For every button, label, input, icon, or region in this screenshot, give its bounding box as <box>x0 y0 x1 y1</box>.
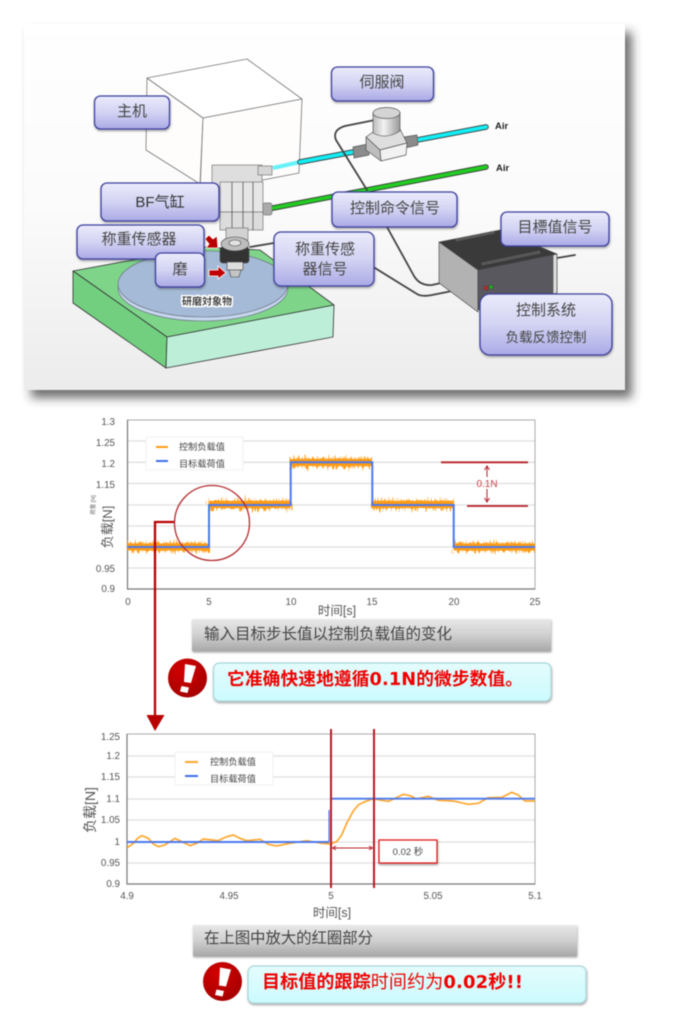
chart: zoomed step response: 4.9 <box>120 891 134 902</box>
green stage <box>73 247 334 368</box>
signal wires <box>250 120 575 296</box>
callout: control system: 控制系统 <box>516 302 576 319</box>
chart: step response: 1.15 <box>96 480 116 491</box>
chart: zoomed step response: 1.1 <box>106 794 120 805</box>
callout: target value signal <box>501 212 609 246</box>
chart: zoomed step response: 5.1 <box>528 891 542 902</box>
marker lines at 5.00 and 5.02 <box>331 729 374 888</box>
legend: chart 2: 目标载荷值 <box>210 773 256 784</box>
callout: host <box>94 96 170 129</box>
chart: zoomed step response: 0.95 <box>101 858 121 869</box>
polishing target disc <box>118 251 288 321</box>
callout: grinder <box>156 253 204 287</box>
band: chart 1 caption <box>192 619 551 651</box>
chart: zoomed step response: 负载[N] <box>82 787 98 833</box>
callout: chart 1 conclusion <box>214 663 551 701</box>
red circle highlight <box>174 486 250 560</box>
legend: chart 1: 控制负载值 <box>179 441 225 452</box>
band: chart 2 caption <box>193 925 577 956</box>
chart: step response: 时间[s] <box>318 604 356 618</box>
green air tube <box>268 167 486 209</box>
chart: zoomed step response: 0.9 <box>106 879 120 890</box>
chart: zoomed step response: 时间[s] <box>313 906 351 920</box>
chart: zoomed step response: 5.05 <box>423 891 443 902</box>
main unit box <box>146 59 302 192</box>
callout: load sensor: 称重传感器 <box>101 231 177 248</box>
chart: zoomed step response: 1 <box>115 837 120 848</box>
annotation: 0.1N step <box>441 462 528 506</box>
callout: chart 2 conclusion <box>248 966 586 1003</box>
callout: load sensor signal: 器信号 <box>302 261 348 278</box>
red arrow to sensor <box>205 235 218 248</box>
chart: step response: 1.25 <box>96 438 116 449</box>
chart: step response: 15 <box>367 597 378 608</box>
legend: chart 1: 目标载荷值 <box>179 458 225 469</box>
chart: step response: 负载[N] <box>100 506 115 548</box>
callout: servo valve: 伺服阀 <box>359 74 405 91</box>
band: chart 1 caption: 输入目标步长值以控制负载值的变化 <box>204 625 452 643</box>
chart: zoomed step response: 1.15 <box>101 772 121 783</box>
label: polishing target: 研磨対象物 <box>182 295 232 308</box>
legend: chart 2 <box>175 752 273 785</box>
chart: step response: 0.9 <box>101 584 115 595</box>
panel: system diagram <box>24 24 625 390</box>
icon: warning 1 <box>168 658 207 698</box>
callout: servo valve <box>332 67 434 101</box>
Air label bottom: Air <box>496 163 510 174</box>
annotation: 0.1N step: 0.1N <box>476 479 498 490</box>
red arrow to grinder <box>209 266 226 279</box>
load sensor and grinder <box>220 237 249 277</box>
annotation: 0.02 s span <box>332 840 437 863</box>
chart: zoomed step response: 1.25 <box>101 732 121 743</box>
callout: control system: 负载反馈控制 <box>506 330 586 345</box>
chart: zoomed step response <box>82 729 542 920</box>
callout: load sensor signal <box>274 232 374 286</box>
BF cylinder <box>212 165 272 240</box>
callout: chart 2 conclusion: 目标值的跟踪时间约为0.02秒!! <box>262 971 523 993</box>
chart: step response: 5 <box>206 597 212 608</box>
callout: control command signal <box>332 192 457 227</box>
icon: warning 2 <box>203 962 242 1001</box>
servo valve <box>353 108 418 161</box>
callout: grinder: 磨 <box>172 261 188 278</box>
chart: step response: 25 <box>530 597 541 608</box>
chart: zoomed step response: 1.05 <box>101 815 121 826</box>
chart: step response: 荷重 [N] <box>89 495 97 515</box>
legend: chart 2: 控制负载值 <box>210 756 256 767</box>
callout: host: 主机 <box>117 103 147 120</box>
chart: zoomed step response: 5 <box>328 891 334 902</box>
chart: step response: 0 <box>125 597 131 608</box>
chart: step response: 1.3 <box>101 417 116 428</box>
arrow: zoom link <box>146 522 174 731</box>
callout: control command signal: 控制命令信号 <box>350 199 440 217</box>
callout: BF cylinder <box>101 183 219 221</box>
Air label top: Air <box>495 121 508 132</box>
legend: chart 1 <box>146 437 243 470</box>
chart: step response: 1.2 <box>101 459 115 470</box>
callout: load sensor signal: 称重传感 <box>295 241 355 258</box>
chart: step response: 0.95 <box>96 564 116 575</box>
callout: BF cylinder: BF气缸 <box>135 193 185 211</box>
annotation: 0.02 s span: 0.02 秒 <box>393 846 424 858</box>
control box <box>439 230 557 312</box>
chart: step response: 10 <box>286 597 297 608</box>
chart: step response: 20 <box>449 597 460 608</box>
band: chart 2 caption: 在上图中放大的红圈部分 <box>204 929 373 947</box>
callout: chart 1 conclusion: 它准确快速地遵循0.1N的微步数值。 <box>227 668 523 690</box>
chart: step response <box>89 417 541 618</box>
callout: target value signal: 目標值信号 <box>517 219 593 236</box>
cyan air tube <box>273 127 486 168</box>
callout: control system <box>480 294 612 355</box>
chart: zoomed step response: 1.2 <box>106 751 120 762</box>
chart: zoomed step response: 4.95 <box>219 891 239 902</box>
callout: load sensor <box>77 225 204 259</box>
